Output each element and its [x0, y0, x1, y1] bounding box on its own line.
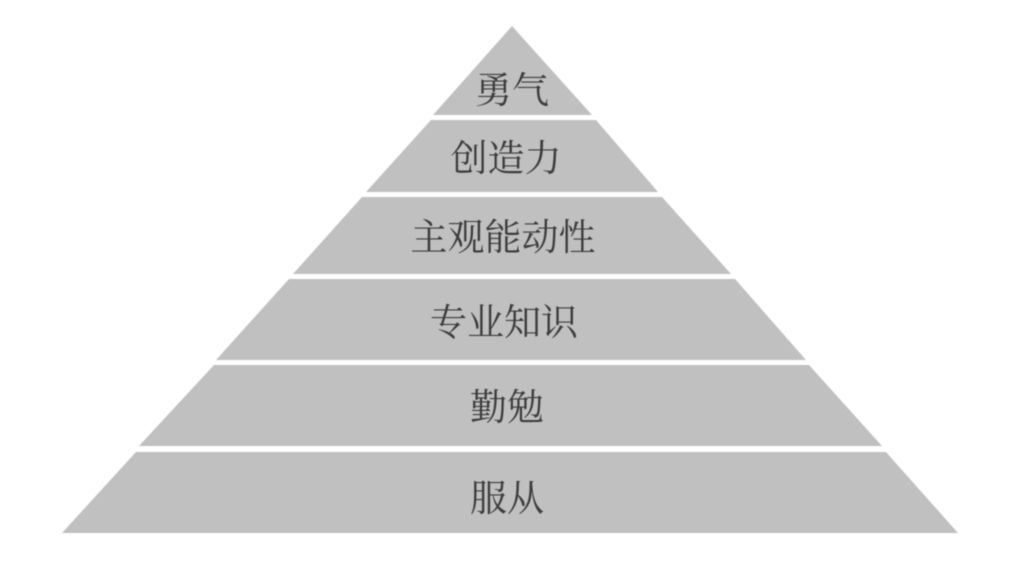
tier 3: initiative: 主观能动性 — [410, 217, 596, 259]
tier 5: diligence — [139, 365, 882, 446]
tier 2: creativity — [366, 120, 658, 192]
tier 3: initiative — [293, 197, 731, 274]
tier 4: expertise: 专业知识 — [430, 302, 579, 344]
tier 1: courage — [433, 26, 592, 115]
tier 5: diligence: 勤勉 — [470, 387, 544, 429]
tier 4: expertise — [216, 279, 806, 360]
tier 6: obedience — [62, 452, 958, 533]
tier 6: obedience: 服从 — [470, 479, 544, 520]
tier 1: courage: 勇气 — [475, 70, 549, 112]
tier 2: creativity: 创造力 — [450, 138, 562, 180]
